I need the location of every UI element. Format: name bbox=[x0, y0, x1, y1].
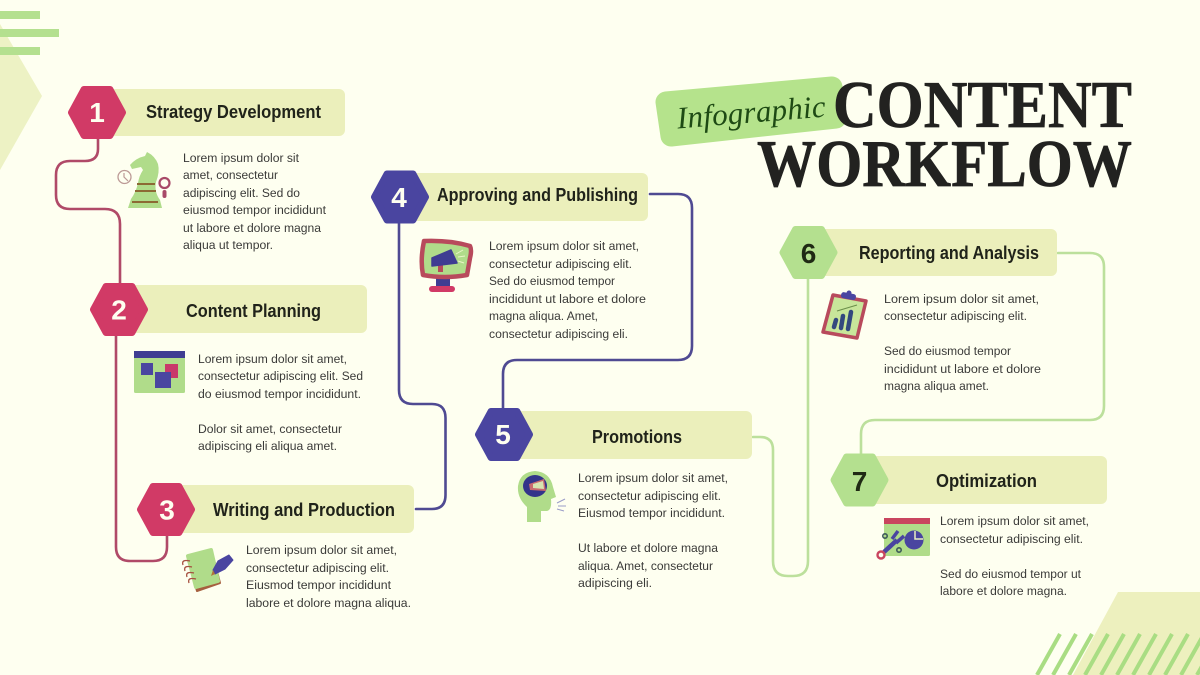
text block: Dolor sit amet, consectetur bbox=[198, 422, 342, 436]
icon: head with megaphone bbox=[518, 471, 566, 522]
icon: clipboard with bar chart bbox=[823, 290, 866, 338]
text block: eiusmod tempor incididunt bbox=[183, 203, 327, 217]
heading text: Approving and Publishing bbox=[437, 185, 638, 205]
panel: step 7 Optimization bbox=[834, 456, 1107, 598]
text block: Sed do eiusmod tempor ut bbox=[940, 567, 1082, 581]
text block: Lorem ipsum dolor sit amet, bbox=[578, 471, 728, 485]
number badge 1 bbox=[72, 90, 122, 136]
text block: labore et dolore magna aliqua. bbox=[246, 596, 411, 610]
panel: step 2 Content Planning bbox=[94, 285, 367, 453]
text block: magna aliqua amet. bbox=[884, 379, 989, 393]
arrow: connector from step 5 to step 6 bbox=[753, 279, 808, 576]
panel: step 6 Reporting and Analysis bbox=[783, 229, 1057, 393]
icon: chess knight with clock and magnifier bbox=[118, 152, 170, 208]
icon: notebook and pen bbox=[183, 550, 233, 591]
text block bbox=[183, 151, 327, 252]
text block: incididunt ut labore et dolore bbox=[489, 292, 646, 306]
number badge 4 bbox=[374, 174, 426, 220]
text block bbox=[246, 543, 411, 610]
heading text: Writing and Production bbox=[213, 500, 395, 520]
heading bar bbox=[867, 456, 1107, 504]
icon: browser window with wrench and pie chart bbox=[878, 518, 930, 558]
heading text: Reporting and Analysis bbox=[859, 243, 1039, 263]
text block: incididunt ut labore et dolore bbox=[884, 362, 1041, 376]
text block: magna aliqua. Amet, bbox=[489, 309, 598, 323]
panel: step 1 Strategy Development bbox=[72, 89, 345, 252]
arrow: connector from step 2 to step 3 bbox=[116, 336, 167, 561]
heading bar bbox=[127, 285, 367, 333]
heading bar bbox=[105, 89, 345, 136]
text block: aliqua ut tempor. bbox=[183, 238, 273, 252]
heading bar bbox=[817, 229, 1057, 276]
text block: Lorem ipsum dolor sit amet, bbox=[884, 292, 1039, 306]
number badge 7: 7 bbox=[852, 466, 867, 497]
text block: amet, consectetur bbox=[183, 168, 278, 182]
number badge 7 bbox=[834, 457, 885, 503]
title bbox=[666, 68, 1132, 201]
heading: CONTENT WORKFLOW: WORKFLOW bbox=[757, 127, 1132, 201]
arrow: connector from step 1 to step 2 bbox=[56, 139, 120, 285]
arrow: connector from step 6 to step 7 bbox=[861, 253, 1104, 454]
text block: Lorem ipsum dolor sit amet, bbox=[940, 514, 1089, 528]
heading text: Strategy Development bbox=[146, 102, 321, 122]
text block: consectetur adipiscing elit. bbox=[489, 257, 632, 271]
text block: Lorem ipsum dolor sit bbox=[183, 151, 300, 165]
text block: Ut labore et dolore magna bbox=[578, 541, 718, 555]
text block bbox=[198, 352, 363, 453]
panel: step 5 Promotions bbox=[478, 411, 752, 590]
text block: adipiscing elit. Sed do bbox=[183, 186, 300, 200]
decoration: bottom-right shape and stripes bbox=[1037, 592, 1200, 675]
text block: Eiusmod tempor incididunt bbox=[246, 578, 392, 592]
text block: Lorem ipsum dolor sit amet, bbox=[198, 352, 347, 366]
icon: monitor with megaphone bbox=[422, 241, 471, 292]
text block bbox=[884, 292, 1041, 393]
text block: do eiusmod tempor incididunt. bbox=[198, 387, 361, 401]
text block: consectetur adipiscing elit. Sed bbox=[198, 369, 363, 383]
icon: planning board bbox=[134, 351, 185, 393]
heading text: Content Planning bbox=[186, 301, 321, 321]
text block: Eiusmod tempor incididunt. bbox=[578, 506, 725, 520]
heading text: Optimization bbox=[936, 471, 1037, 491]
heading bar bbox=[512, 411, 752, 459]
heading: CONTENT WORKFLOW: CONTENT bbox=[833, 68, 1132, 142]
text block: adipiscing eli aliqua amet. bbox=[198, 439, 337, 453]
text block: adipiscing eli. bbox=[578, 576, 652, 590]
heading bar bbox=[174, 485, 414, 533]
panel: step 3 Writing and Production bbox=[140, 485, 414, 610]
text block: ut labore et dolore magna bbox=[183, 221, 321, 235]
number badge 3 bbox=[140, 486, 192, 532]
number badge 6 bbox=[783, 230, 834, 276]
heading text: Promotions bbox=[592, 427, 682, 447]
text block bbox=[489, 239, 646, 341]
text block: consectetur adipiscing elit. bbox=[578, 489, 721, 503]
heading: CONTENT WORKFLOW bbox=[757, 68, 1132, 201]
arrow: connector from step 4 to step 5 bbox=[503, 194, 692, 408]
number badge 2: 2 bbox=[111, 294, 127, 326]
text block bbox=[578, 471, 728, 590]
text block: consectetur adipiscing eli. bbox=[489, 327, 628, 341]
decoration: top-left chevron and bars bbox=[0, 11, 59, 170]
text block: aliqua. Amet, consectetur bbox=[578, 559, 713, 573]
number badge 4: 4 bbox=[391, 182, 407, 213]
arrow: connector from step 3 to step 4 bbox=[399, 223, 446, 509]
text block: labore et dolore magna. bbox=[940, 584, 1067, 598]
number badge 5 bbox=[478, 412, 530, 458]
text block: Lorem ipsum dolor sit amet, bbox=[489, 239, 639, 253]
text block bbox=[940, 514, 1089, 598]
text block: consectetur adipiscing elit. bbox=[884, 309, 1027, 323]
text block: Sed do eiusmod tempor bbox=[884, 344, 1011, 358]
text block: consectetur adipiscing elit. bbox=[246, 561, 389, 575]
number badge 5: 5 bbox=[495, 419, 511, 450]
text block: Lorem ipsum dolor sit amet, bbox=[246, 543, 397, 557]
text block: Sed do eiusmod tempor bbox=[489, 274, 615, 288]
number badge 6: 6 bbox=[801, 238, 816, 269]
number badge 2 bbox=[94, 286, 144, 332]
heading bar bbox=[408, 173, 648, 221]
text block: consectetur adipiscing elit. bbox=[940, 532, 1083, 546]
number badge 3: 3 bbox=[159, 494, 175, 526]
badge: Infographic: Infographic bbox=[674, 89, 827, 136]
panel: step 4 Approving and Publishing bbox=[374, 173, 648, 341]
number badge 1: 1 bbox=[89, 97, 105, 128]
